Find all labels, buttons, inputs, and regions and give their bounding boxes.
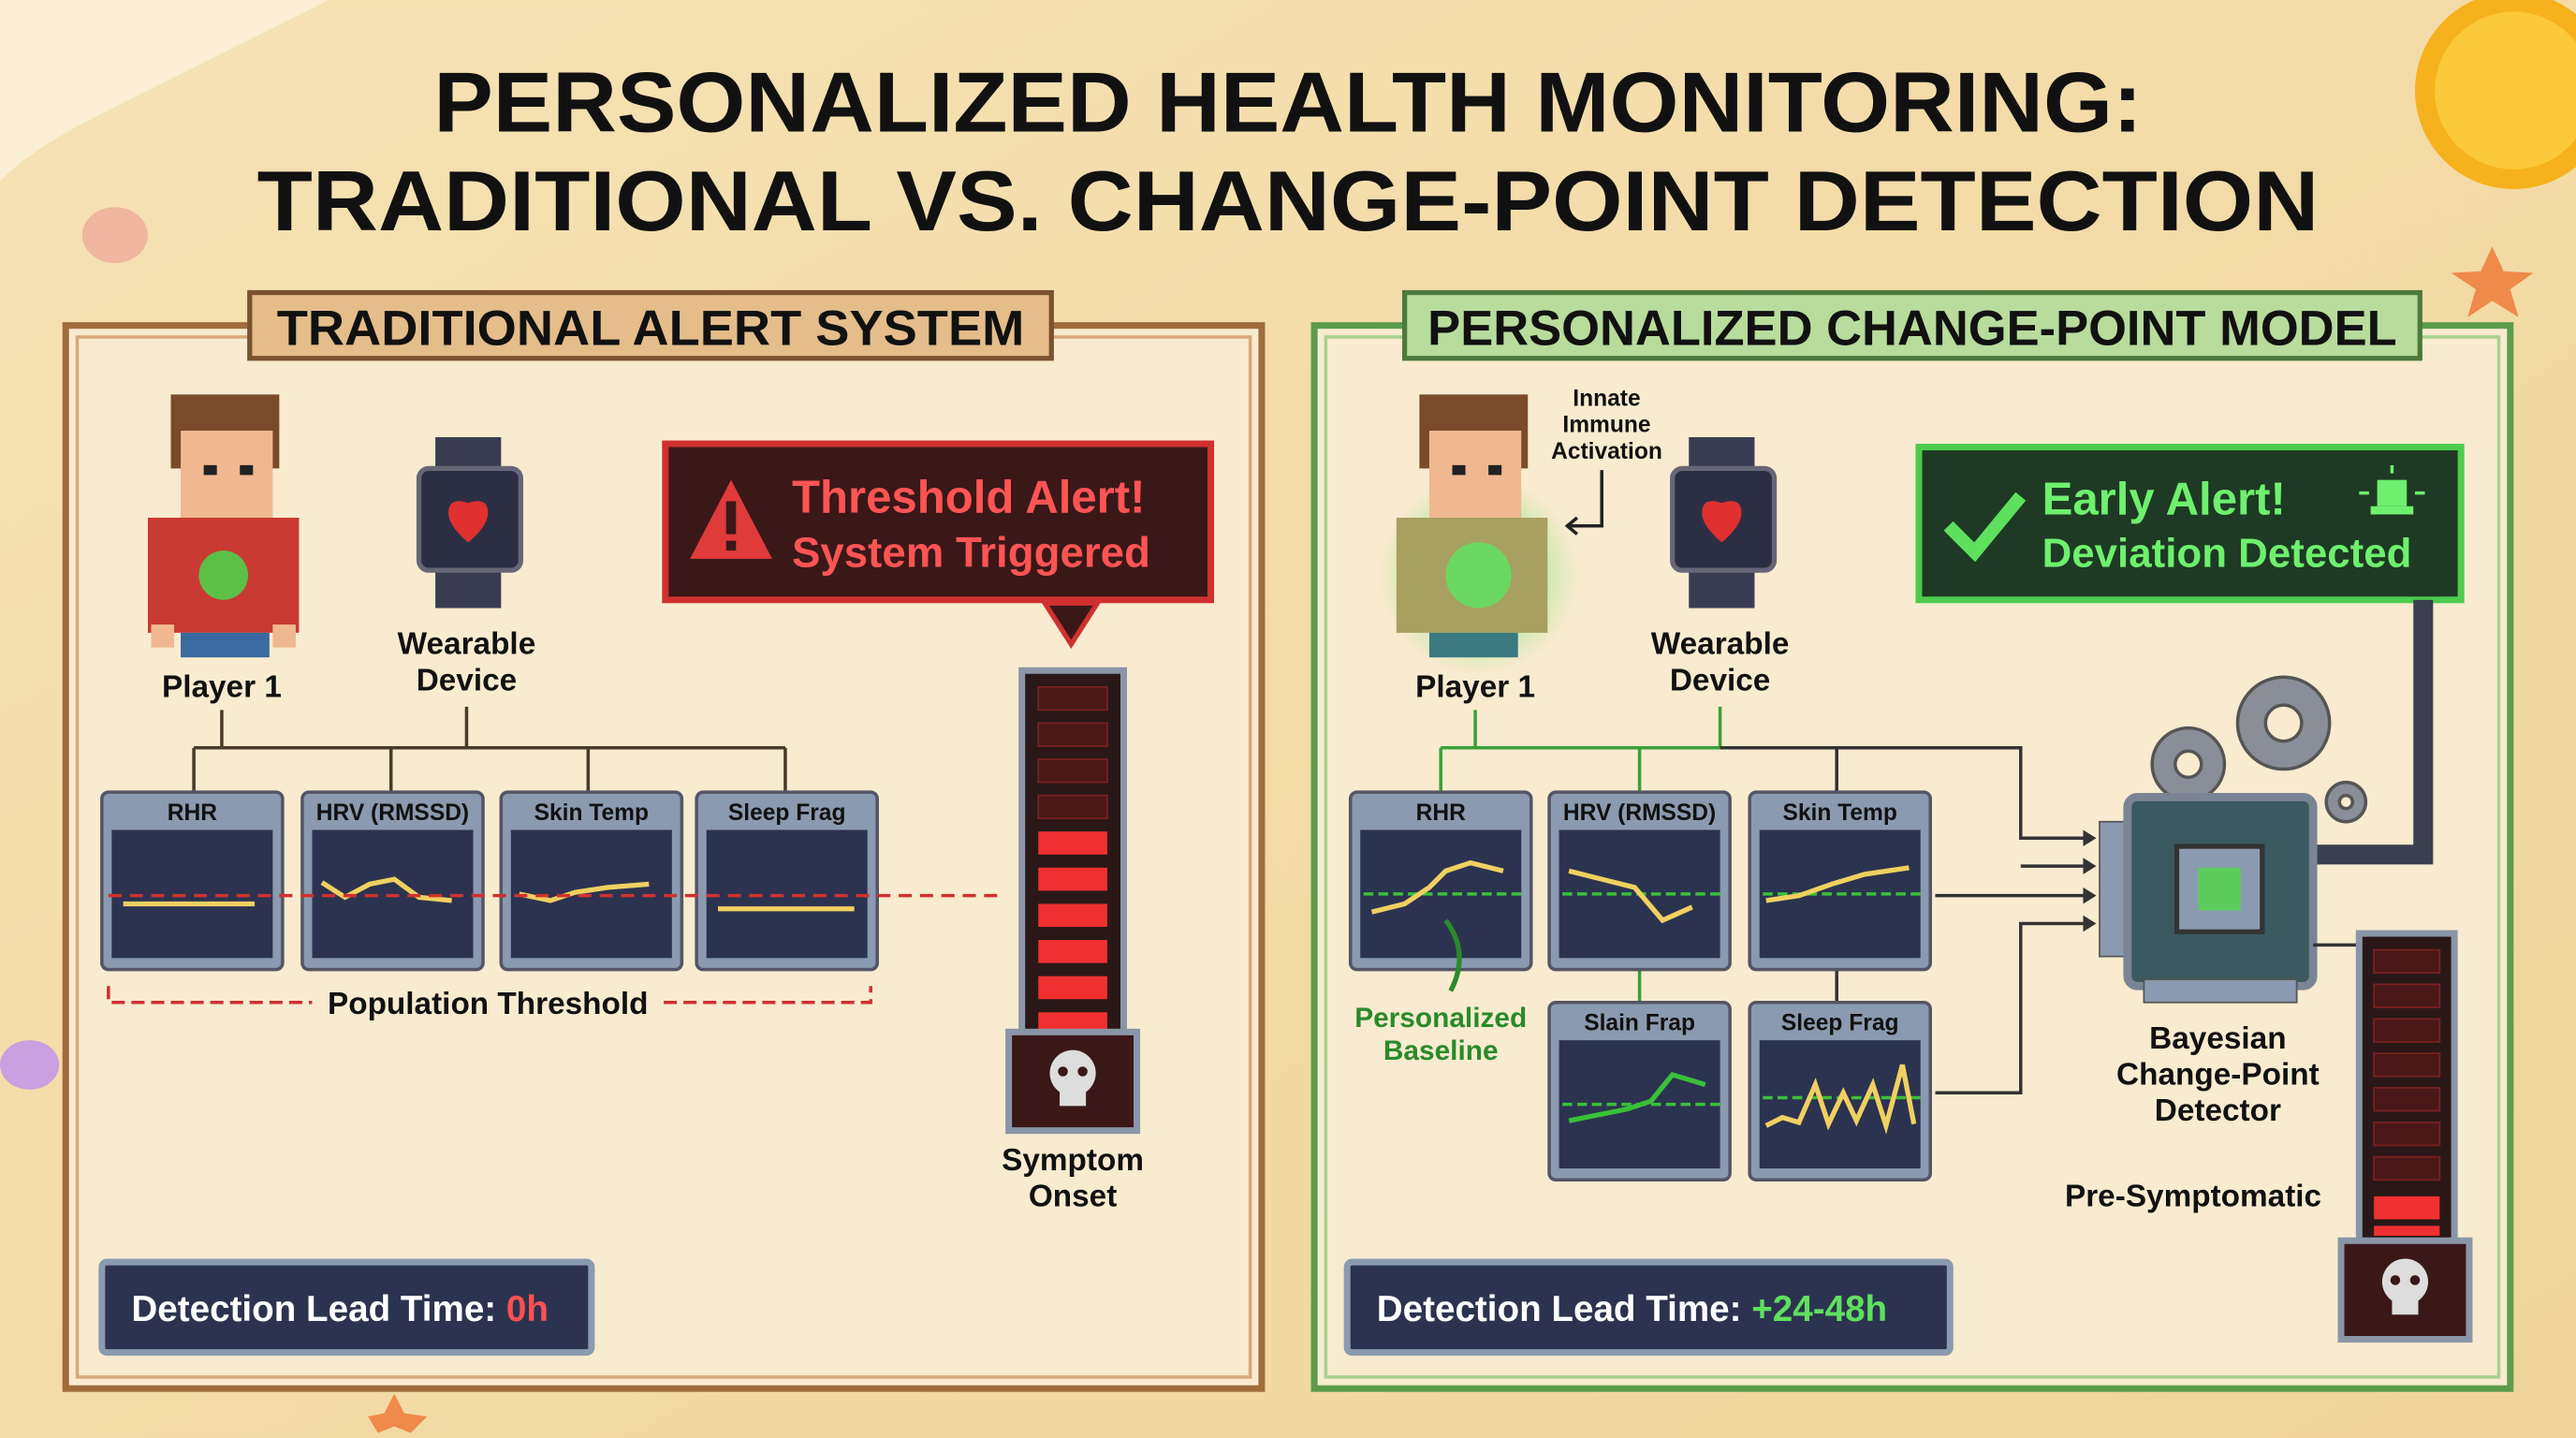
icon: starfish top right <box>2452 246 2533 317</box>
icon: bayesian detector chip <box>2100 797 2313 1003</box>
text: innate immune activation: Immune <box>1562 413 1651 438</box>
text: wearable device right: Wearable <box>1651 627 1789 662</box>
detection lead time right <box>1347 1262 1950 1353</box>
detection lead time left <box>102 1262 592 1353</box>
text: player 1: Player 1 <box>162 669 282 704</box>
icon: player 1 with immune glow <box>1380 394 1577 674</box>
connector lines green <box>1441 707 1720 1003</box>
chart: RHR personalized <box>1351 792 1531 970</box>
text: innate immune activation: Activation <box>1551 439 1662 464</box>
heading: traditional: TRADITIONAL ALERT SYSTEM <box>277 301 1024 357</box>
title: PERSONALIZED HEALTH MONITORING: <box>433 55 2143 151</box>
chart: skin temp personalized: Skin Temp <box>1783 800 1897 826</box>
text: population threshold <box>109 986 871 1021</box>
text: bayesian change-point detector: Change-Point <box>2116 1058 2320 1093</box>
icon: thermometer gauge right <box>2341 933 2469 1340</box>
text: personalized baseline: Baseline <box>1383 1035 1499 1066</box>
icon: thermometer gauge <box>1009 670 1137 1131</box>
text: wearable device: Device <box>417 663 517 697</box>
arrows into detector <box>2083 829 2097 932</box>
title: TRADITIONAL VS. CHANGE-POINT DETECTION <box>257 154 2319 249</box>
icon: wearable watch <box>419 437 520 609</box>
chart: sleep frag personalized <box>1749 1003 1930 1180</box>
connector lines <box>194 707 785 792</box>
text: wearable device: Wearable <box>398 627 535 662</box>
heading: personalized: PERSONALIZED CHANGE-POINT MODEL <box>1427 301 2397 357</box>
text: bayesian change-point detector: Detector <box>2155 1093 2281 1128</box>
text: symptom onset: Onset <box>1029 1179 1117 1213</box>
chart: HRV: HRV (RMSSD) <box>316 800 469 826</box>
callout: threshold alert <box>666 444 1211 644</box>
icon: sun <box>2415 0 2576 189</box>
icon: gears <box>2152 677 2365 822</box>
text: pre-symptomatic: Pre-Symptomatic <box>2065 1179 2321 1213</box>
detection lead time right: Detection Lead Time: +24-48h <box>1377 1289 1887 1329</box>
icon: wearable watch right <box>1673 437 1775 609</box>
chart: RHR personalized: RHR <box>1416 800 1466 826</box>
text: personalized baseline <box>1354 920 1527 1066</box>
text: innate immune activation: Innate <box>1573 387 1641 412</box>
text: wearable device right: Device <box>1670 663 1770 697</box>
callout: threshold alert: System Triggered <box>792 529 1150 577</box>
chart: sleep frag <box>696 792 877 970</box>
icon: shells left <box>0 207 222 1221</box>
chart: slain frap: Slain Frap <box>1584 1011 1695 1036</box>
pipe to alert <box>2308 600 2423 855</box>
callout: early alert: Deviation Detected <box>2042 531 2411 577</box>
callout: early alert: Early Alert! <box>2042 474 2286 524</box>
line detector to gauge <box>2313 933 2407 945</box>
text: innate immune activation <box>1551 387 1662 535</box>
chart: slain frap <box>1549 1003 1730 1180</box>
chart: skin temp personalized <box>1749 792 1930 970</box>
text: player 1 right: Player 1 <box>1415 669 1535 704</box>
icon: siren <box>2359 465 2425 514</box>
text: symptom onset: Symptom <box>1002 1143 1144 1178</box>
chart: HRV personalized: HRV (RMSSD) <box>1563 800 1716 826</box>
chart: RHR <box>102 792 283 970</box>
text: bayesian change-point detector: Bayesian <box>2149 1021 2287 1056</box>
chart: skin temp <box>501 792 681 970</box>
population threshold line <box>109 895 1005 897</box>
chart: RHR: RHR <box>168 800 217 826</box>
panel: traditional alert system <box>66 293 1262 1388</box>
chart: sleep frag personalized: Sleep Frag <box>1781 1011 1899 1036</box>
text: personalized baseline: Personalized <box>1354 1003 1527 1034</box>
panel: personalized change-point model <box>1314 293 2510 1388</box>
chart: sleep frag: Sleep Frag <box>728 800 845 826</box>
icon: starfish bottom <box>368 1249 1183 1433</box>
chart: HRV personalized <box>1549 792 1730 970</box>
callout: early alert <box>1919 448 2461 600</box>
callout: threshold alert: Threshold Alert! <box>792 473 1146 523</box>
icon: player 1 sick <box>148 394 299 657</box>
chart: skin temp: Skin Temp <box>534 800 649 826</box>
chart: HRV <box>302 792 483 970</box>
title <box>257 55 2319 249</box>
detection lead time left: Detection Lead Time: 0h <box>131 1289 549 1329</box>
text: population threshold: Population Threshold <box>328 987 649 1021</box>
